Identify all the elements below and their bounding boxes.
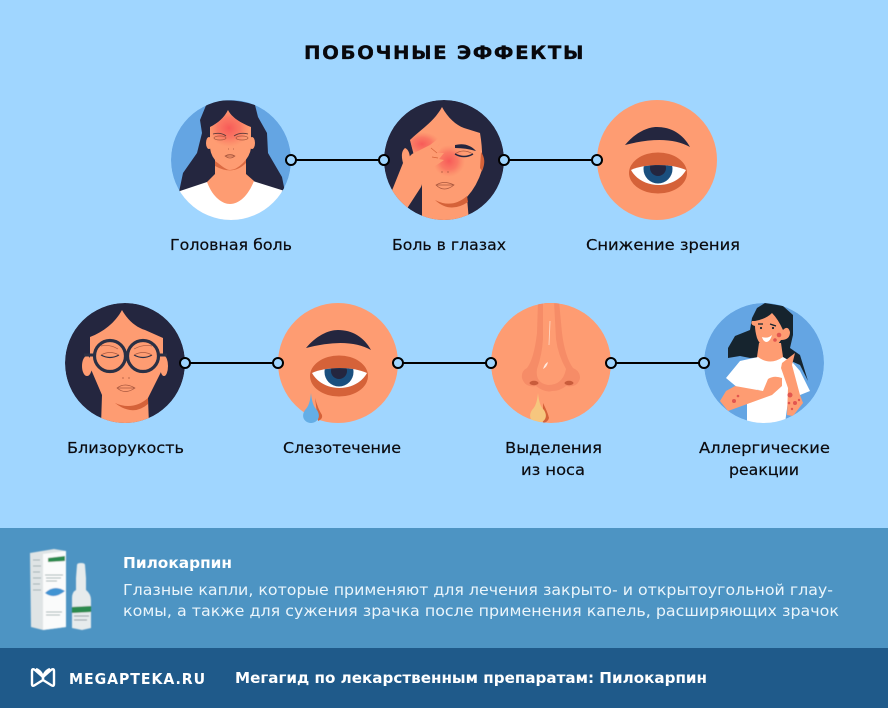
panel: drug info [0, 528, 888, 648]
icon: drug box and bottle [30, 549, 91, 630]
label: Близорукость [67, 439, 184, 457]
icon: logo [32, 669, 54, 686]
title: ПОБОЧНЫЕ ЭФФЕКТЫ [304, 42, 585, 64]
icon: watering eye with tear [278, 303, 398, 423]
label: Головная боль [170, 236, 292, 254]
description: Глазные капли, которые применяют для лечения закрыто- и открытоугольной глау- [123, 581, 833, 599]
label: Слезотечение [283, 439, 401, 457]
connector: nasal discharge to allergy [606, 358, 709, 368]
label: Снижение зрения [586, 236, 740, 254]
icon: eye pain woman [379, 100, 504, 222]
footer link: Мегагид по лекарственным препаратам: Пилокарпин [235, 669, 707, 687]
description [123, 581, 839, 620]
footer band [0, 648, 888, 708]
label: Боль в глазах [392, 236, 506, 254]
connector: tearing to nasal discharge [393, 358, 496, 368]
icon: myopia woman with glasses [65, 303, 185, 425]
label: из носа [521, 461, 585, 479]
drug name: Пилокарпин [123, 554, 232, 572]
label: Аллергические [699, 439, 830, 457]
connector: headache to eye pain [286, 155, 389, 165]
label: реакции [729, 461, 799, 479]
icon: nose with discharge [491, 301, 611, 423]
label [505, 439, 602, 479]
label [699, 439, 830, 479]
icon: reduced vision eye [597, 100, 717, 220]
connector: myopia to tearing [180, 358, 283, 368]
description: комы, а также для сужения зрачка после применения капель, расширяющих зрачок [123, 602, 839, 620]
label: Выделения [505, 439, 602, 457]
icon: headache woman [171, 100, 291, 222]
icon: woman with allergic rash [704, 303, 824, 423]
connector: eye pain to vision loss [499, 155, 602, 165]
brand name: MEGAPTEKA.RU [69, 670, 206, 688]
